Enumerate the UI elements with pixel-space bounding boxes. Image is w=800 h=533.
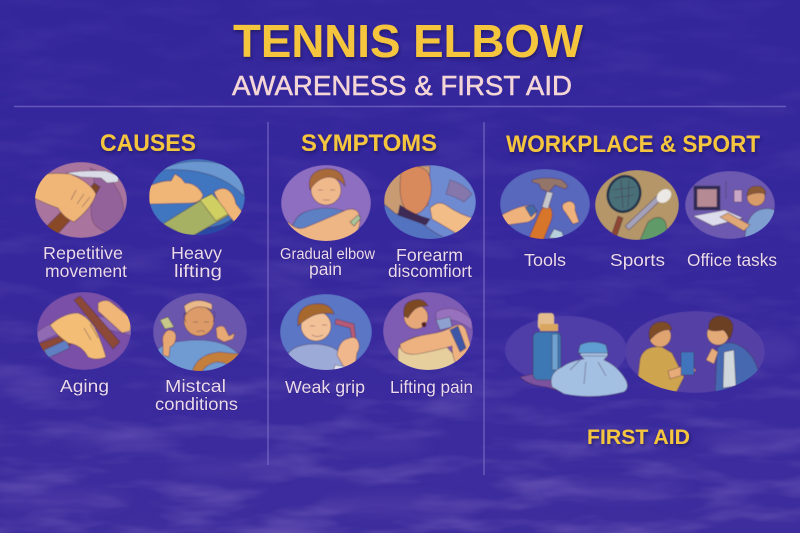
label: office tasks: Office tasks <box>687 250 777 270</box>
panel: workplace and sport <box>500 131 777 270</box>
title: TENNIS ELBOW <box>233 15 584 67</box>
label: heavy lifting: lifting <box>174 261 222 281</box>
icon: hand gripping hammer <box>30 162 127 238</box>
heading: first aid: FIRST AID <box>587 426 690 449</box>
label: heavy lifting: Heavy <box>171 243 222 263</box>
heading: workplace and sport: WORKPLACE & SPORT <box>506 131 760 158</box>
label: gradual elbow pain: Gradual elbow <box>280 246 376 263</box>
icon: aging hands <box>37 292 132 370</box>
label: mistcal conditions <box>155 376 238 414</box>
icon: man with lifting pain <box>383 292 473 372</box>
label: sports: Sports <box>610 250 665 270</box>
label: forearm discomfort <box>388 245 472 281</box>
label: heavy lifting <box>171 243 222 281</box>
heading: causes: CAUSES <box>100 130 196 157</box>
label: mistcal conditions: Mistcal <box>165 376 226 396</box>
label: repetitive movement: movement <box>45 261 127 281</box>
label: tools: Tools <box>524 250 566 270</box>
icon: tools <box>500 169 590 241</box>
label: gradual elbow pain: pain <box>309 259 342 279</box>
subtitle: AWARENESS & FIRST AID <box>232 70 572 101</box>
label: repetitive movement <box>43 243 127 281</box>
label: weak grip: Weak grip <box>285 377 365 397</box>
icon: boy with weak grip <box>280 294 372 373</box>
label: aging: Aging <box>60 376 109 396</box>
icon: two people talking <box>625 311 765 397</box>
icon: office tasks <box>685 171 777 240</box>
label: lifting pain: Lifting pain <box>390 377 473 397</box>
label: gradual elbow pain <box>280 246 376 279</box>
icon: sports <box>595 170 679 244</box>
panel: symptoms <box>280 130 476 397</box>
label: forearm discomfort: Forearm <box>396 245 463 265</box>
panel: causes <box>30 130 250 414</box>
label: forearm discomfort: discomfiort <box>388 261 472 281</box>
icon: forearm discomfort <box>384 165 476 240</box>
panel: first aid <box>505 311 765 449</box>
icon: boy holding elbow <box>281 165 371 245</box>
heading: symptoms: SYMPTOMS <box>301 130 437 157</box>
label: repetitive movement: Repetitive <box>43 243 123 263</box>
icon: bottle and ice pack <box>505 313 628 397</box>
label: mistcal conditions: conditions <box>155 394 238 414</box>
icon: heavy lifting <box>149 159 248 239</box>
icon: bald man with sore arm <box>153 293 247 371</box>
divider lines <box>14 106 786 475</box>
